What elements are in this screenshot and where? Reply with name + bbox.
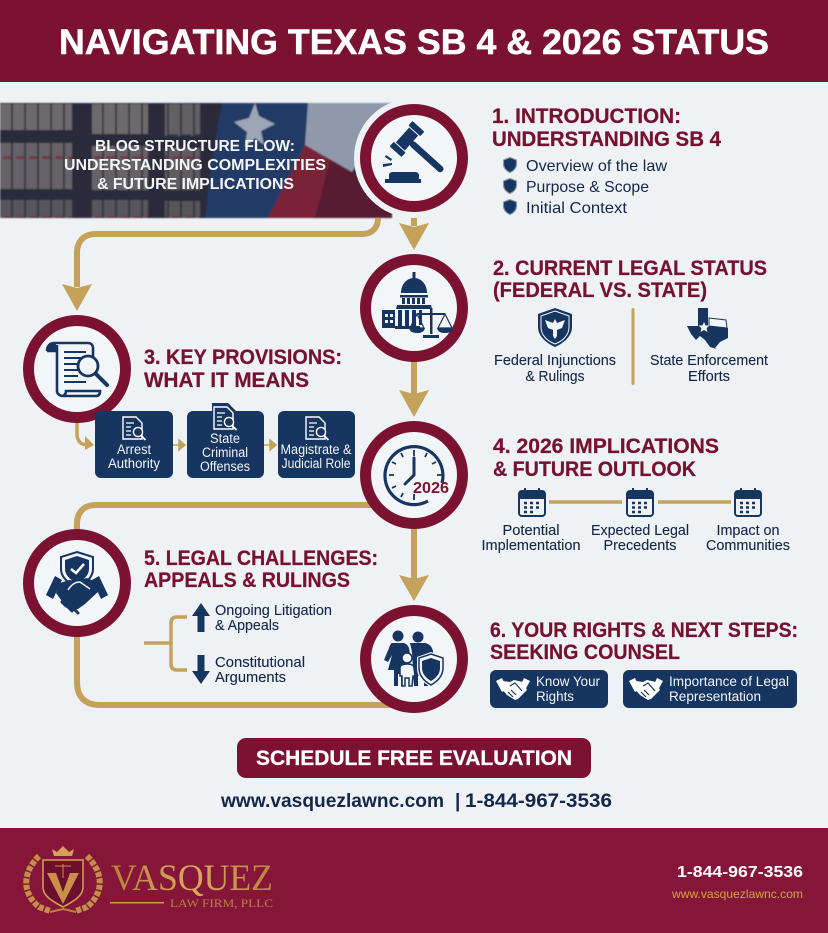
banner text: UNDERSTANDING COMPLEXITIES [64,157,326,174]
card: magistrate and judicial role: Magistrate & [280,442,352,457]
timeline line [549,500,731,504]
contact line: | [455,791,460,812]
section 6 text: SEEKING COUNSEL [490,640,680,664]
footer website: www.vasquezlawnc.com [671,887,803,901]
milestone: impact on communities: Impact on [716,522,780,539]
provisions flow [95,403,355,478]
bracket [144,617,187,670]
call to action button: SCHEDULE FREE EVALUATION [256,746,572,770]
banner text: & FUTURE IMPLICATIONS [97,176,294,193]
heading: step 4: 4. 2026 IMPLICATIONS [493,434,719,458]
button: importance of legal representation: Representation [669,689,761,704]
card: arrest authority: Arrest [117,442,151,457]
milestone: potential implementation: Potential [502,522,560,539]
section 4 text [482,434,790,554]
banner text [64,138,326,193]
arrow up with label [192,602,332,634]
button: importance of legal representation [623,670,797,708]
milestone: potential implementation: Implementation [482,537,580,554]
federal label: & Rulings [526,368,584,385]
connector: step 1 to step 3 [62,218,378,311]
state label: State Enforcement [650,352,769,369]
section 1 text [492,104,721,217]
section 1 text: UNDERSTANDING SB 4 [492,127,721,151]
icon: scroll with magnifier [47,343,107,396]
circle: step 3 scroll and magnifier [28,320,126,418]
logo: wordmark: LAW FIRM, PLLC [170,898,273,910]
footer band [0,828,828,933]
logo: wordmark: VASQUEZ [111,858,273,899]
card: state criminal offenses: State [210,431,240,446]
arrow: step 1 to step 2 [399,210,429,250]
bullet list: Overview of the law [526,158,667,175]
circle: step 6 family and shield [366,610,462,708]
circle: step 4 clock [366,426,462,524]
arrow down with label [192,654,305,686]
circle: step 2 capitol and scales [366,260,462,356]
connector: step 3 to provisions [77,422,94,450]
logo: crest [26,846,100,912]
heading: step 3: WHAT IT MEANS [144,368,309,392]
heading: step 5: 5. LEGAL CHALLENGES: [144,546,378,570]
icon: clock with 2026: 2026 [413,480,449,497]
arrow down with label: Constitutional [215,654,305,671]
bullet list: Initial Context [526,200,628,217]
contact line [220,791,612,812]
divider [632,308,634,385]
milestone: impact on communities [706,488,790,554]
header band [0,0,828,82]
circle: step 5 shield and handshake [28,534,126,632]
milestone: expected legal precedents: Precedents [604,537,676,554]
arrow: step 2 to step 4 [399,360,429,417]
milestone: expected legal precedents: Expected Legal [591,522,689,539]
card: magistrate and judicial role [278,411,355,478]
icon: shield and handshake [46,552,108,613]
arrow [264,440,276,450]
state label: Efforts [688,368,730,385]
section 2 text: (FEDERAL VS. STATE) [493,278,707,302]
state label [650,352,769,385]
icon: family with shield [384,630,445,687]
call to action button [237,738,591,778]
icon: Texas map [687,308,728,349]
connector: step 4 to step 5 [77,505,372,532]
footer phone: 1-844-967-3536 [677,864,803,881]
arrow: step 4 to step 6 [399,527,429,601]
heading: step 3: 3. KEY PROVISIONS: [144,345,342,369]
button: know your rights [490,670,608,708]
bullet list [504,158,667,217]
section 2 text [493,256,769,385]
heading: step 5: APPEALS & RULINGS [144,568,350,592]
arrow up with label: Ongoing Litigation [215,602,332,619]
federal label: Federal Injunctions [494,352,616,369]
icon: federal shield [538,308,572,347]
contact line: 1-844-967-3536 [465,791,612,812]
arrow up with label: & Appeals [215,617,279,634]
card: arrest authority [95,411,173,478]
milestone: potential implementation [482,488,580,554]
heading: step 3 [144,345,342,392]
contact line: www.vasquezlawnc.com [220,791,444,812]
heading: step 2: 2. CURRENT LEGAL STATUS [493,256,767,280]
button: know your rights: Rights [536,689,574,704]
card: state criminal offenses: Offenses [200,459,250,474]
title: NAVIGATING TEXAS SB 4 & 2026 STATUS [59,23,769,62]
banner: law library and Texas flag [0,103,392,218]
icon: capitol and scales [382,272,453,338]
federal label [494,352,616,385]
heading: step 5 [144,546,378,592]
banner text: BLOG STRUCTURE FLOW: [95,138,295,155]
connector: step 5 to step 6 [77,636,392,705]
card: magistrate and judicial role: Judicial Role [282,456,350,471]
arrow [173,440,185,450]
card: state criminal offenses: Criminal [202,445,248,460]
heading: step 1: 1. INTRODUCTION: [492,104,681,128]
arrow down with label: Arguments [215,669,286,686]
circle: step 1 gavel [354,98,474,218]
section 6 text [490,618,798,708]
button: importance of legal representation: Importance of Legal [669,674,789,689]
card: state criminal offenses [187,403,264,478]
milestone: expected legal precedents [591,488,689,554]
heading: step 6: 6. YOUR RIGHTS & NEXT STEPS: [490,618,798,642]
section 4 text: & FUTURE OUTLOOK [493,457,696,481]
card: arrest authority: Authority [108,456,160,471]
button: know your rights: Know Your [536,674,600,689]
icon: gavel [383,121,454,184]
milestone: impact on communities: Communities [706,537,790,554]
litigation branches [144,602,332,686]
bullet list: Purpose & Scope [526,179,649,196]
